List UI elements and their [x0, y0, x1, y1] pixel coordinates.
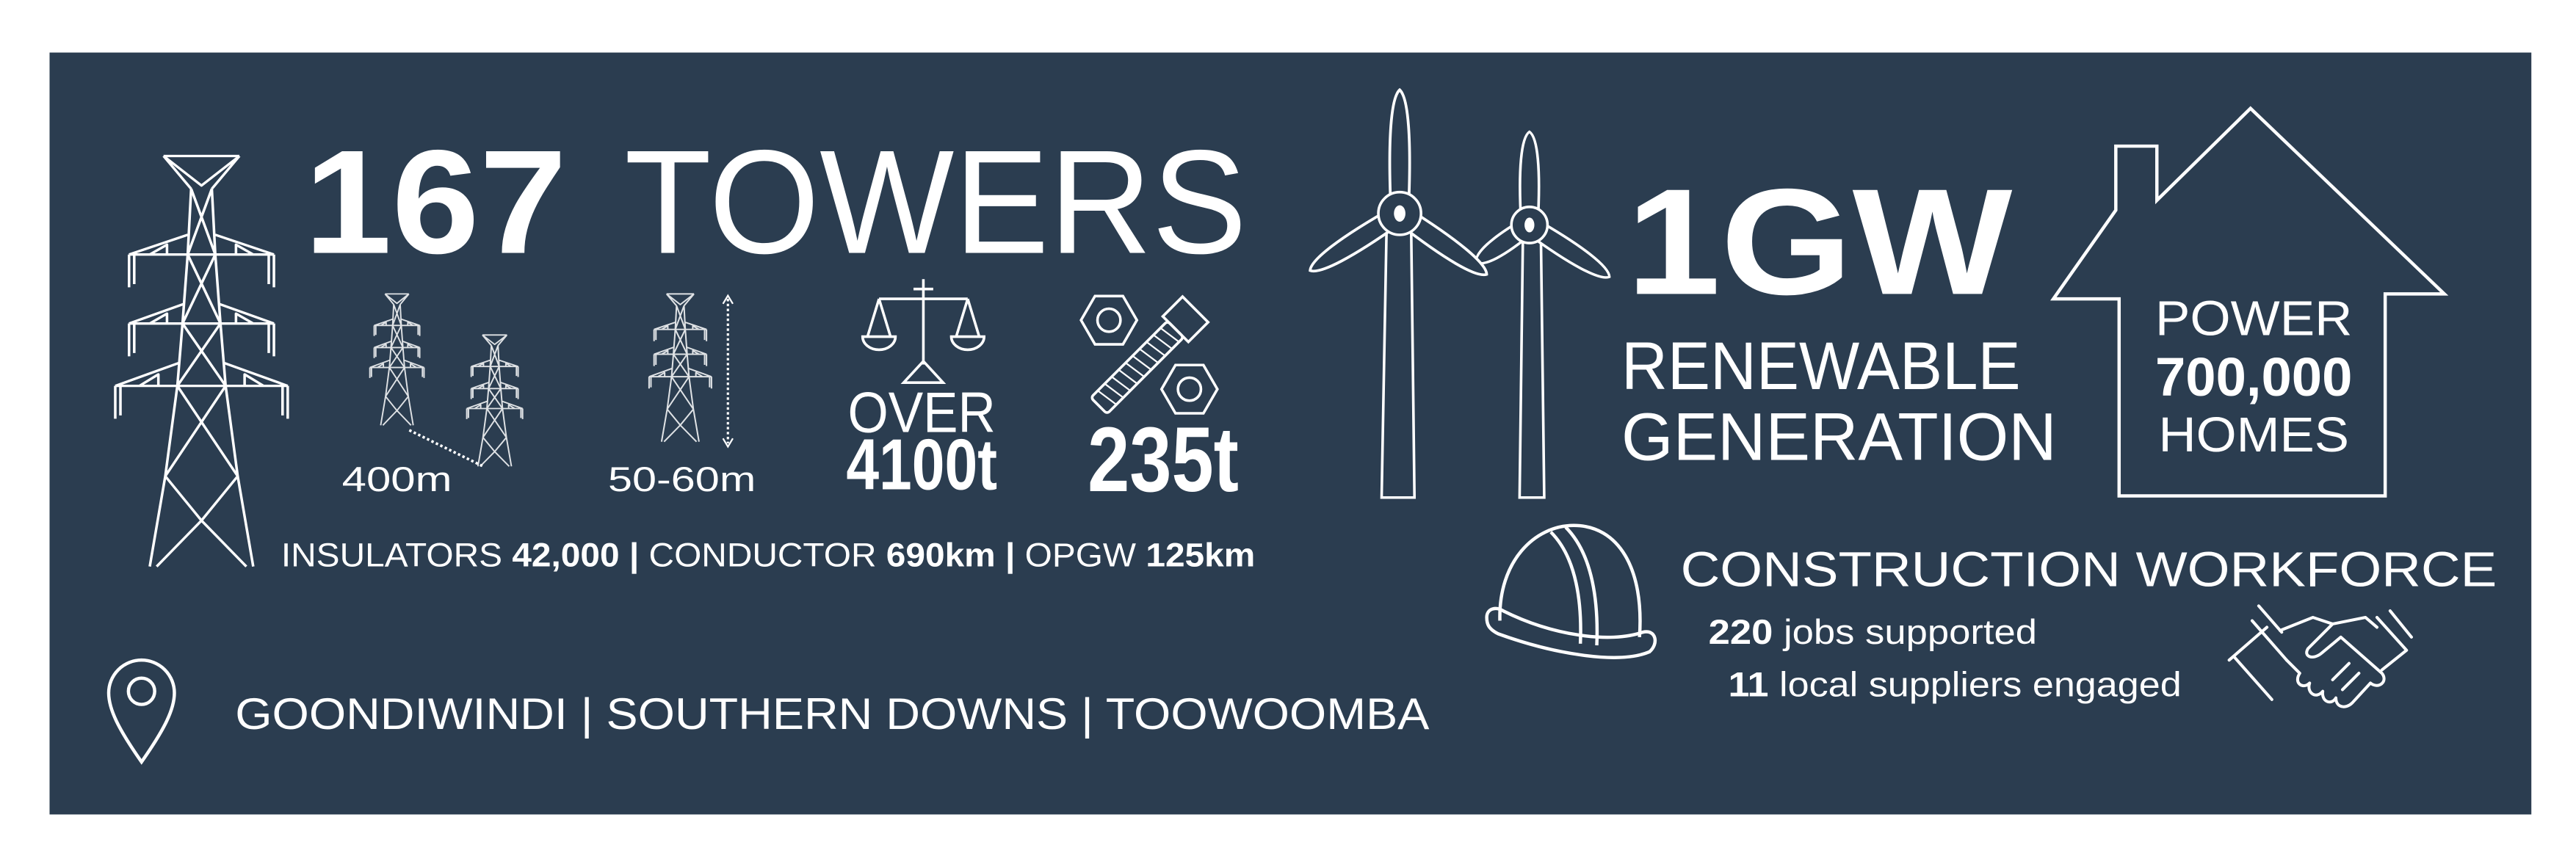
icon: handshake	[2229, 606, 2412, 707]
text: insulators conductor opgw: INSULATORS 42,000 | CONDUCTOR 690km | OPGW 125km	[281, 536, 1255, 574]
text: over 4100t: 4100t	[846, 424, 997, 505]
icon: house with power homes	[2053, 109, 2445, 496]
heading: 167 towers	[304, 119, 1247, 284]
icon: house with power homes: POWER	[2155, 291, 2352, 346]
text: over 4100t: OVER	[848, 380, 996, 444]
heading: construction workforce: CONSTRUCTION WORKFORCE	[1681, 543, 2497, 598]
heading: 1GW renewable generation: 1GW	[1627, 157, 2013, 326]
icon: wind turbines	[1305, 90, 1615, 498]
icon: house with power homes: HOMES	[2158, 407, 2349, 462]
heading: 1GW renewable generation	[1621, 157, 2057, 474]
icon: tower spacing 400m: 400m	[342, 460, 452, 498]
heading: 167 towers: 167	[304, 119, 567, 284]
icon: large transmission tower	[115, 156, 288, 567]
icon: hard hat	[1487, 526, 1655, 658]
icon: tower height 50-60m	[608, 294, 756, 498]
text: jobs and suppliers: 11 local suppliers engaged	[1728, 664, 2182, 703]
text: jobs and suppliers	[1709, 612, 2182, 703]
icon: house with power homes: 700,000	[2155, 347, 2352, 407]
icon: tower height 50-60m: 50-60m	[608, 460, 756, 498]
text: 235t: 235t	[1088, 408, 1239, 511]
heading: 167 towers: TOWERS	[624, 119, 1247, 284]
text: over 4100t	[846, 380, 997, 505]
icon: tower spacing 400m	[342, 294, 523, 498]
icon: nuts and bolt	[1081, 296, 1218, 418]
heading: 1GW renewable generation: GENERATION	[1621, 399, 2057, 474]
icon: weighing scale	[863, 279, 984, 382]
text: jobs and suppliers: 220 jobs supported	[1709, 612, 2037, 651]
text: regions: GOONDIWINDI | SOUTHERN DOWNS | TOOWOOMBA	[235, 689, 1430, 739]
icon: location pin	[109, 660, 174, 762]
heading: 1GW renewable generation: RENEWABLE	[1621, 329, 2021, 404]
